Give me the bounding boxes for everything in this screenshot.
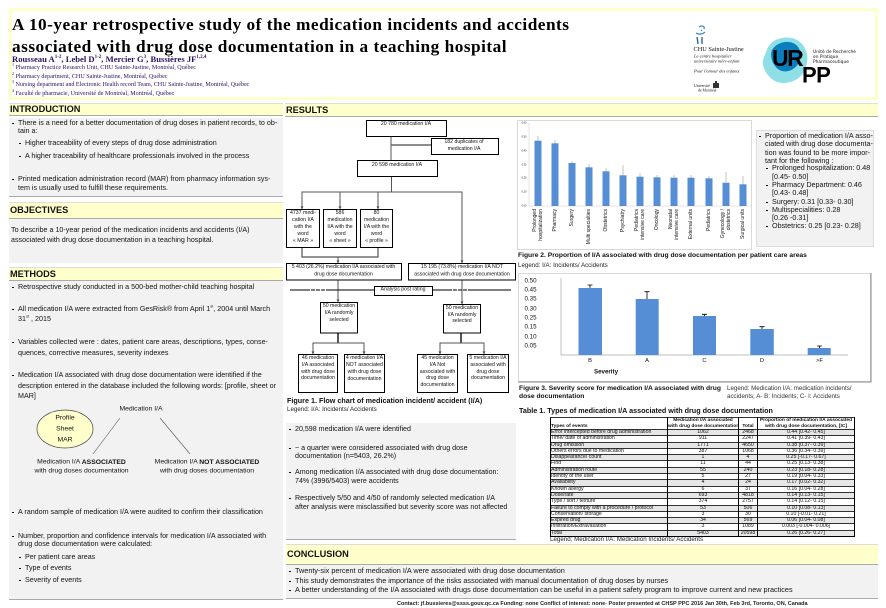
panel: conclusion xyxy=(286,544,878,599)
heading: introduction: INTRODUCTION xyxy=(10,104,80,114)
text: methods body: 31st , 2015 xyxy=(18,314,51,323)
panel: proportion by care area xyxy=(756,130,874,247)
text: introduction bullets: Higher traceability of every steps of drug dose administration xyxy=(25,139,217,147)
table 1: types of events: Disappearance/ count xyxy=(551,454,601,460)
box: remaining medication I/A xyxy=(358,160,438,176)
table 1: types of events: Others errors due to medication xyxy=(551,448,624,454)
table 1: types of events: 2247 xyxy=(742,435,754,441)
text: methods body: Severity of events xyxy=(25,576,82,584)
text: introduction bullets: There is a need for a better documentation of drug doses in patient records, to ob- xyxy=(18,119,277,127)
logo: CHU Sainte-Justine: universitaire mère-enfant xyxy=(694,58,740,64)
box: 46 associated: with drug dose xyxy=(301,369,335,375)
table 1: types of events: Expired drug xyxy=(551,517,580,523)
table 1: types of events: 1089 xyxy=(742,523,754,529)
bar chart: figure 2: 0.50 xyxy=(522,136,527,138)
box: 46 associated xyxy=(298,354,338,392)
bar chart: figure 2 xyxy=(517,120,752,250)
bar chart: figure 3 severity: 0.15 xyxy=(524,324,537,330)
title: A 10-year retrospective study of the medication incidents and accidents xyxy=(12,15,570,34)
table 1: types of events: 0.10 [-0.01- 0.21] xyxy=(786,511,826,517)
table 1: types of events: Infiltration/Extravasation xyxy=(551,523,606,529)
bar chart: figure 2: intensive care xyxy=(640,209,646,240)
heading: results xyxy=(285,103,878,117)
table 1: types of events: Identity of the user xyxy=(551,473,594,479)
box: word profile: « profile » xyxy=(365,238,388,244)
box: total medication I/A: 20 780 medication I/A xyxy=(381,121,432,127)
text: introduction bullets: tem is usually used to fulfill these requirements. xyxy=(18,184,168,192)
table 1: types of events: 0.25 [0.13- 0.38] xyxy=(787,460,825,466)
box: 50 randomly selected, left xyxy=(320,302,358,333)
table 1: types of events: 1068 xyxy=(742,448,754,454)
table 1: types of events: 569 xyxy=(744,517,752,523)
title: associated with drug dose documentation in a teaching hospital xyxy=(12,37,507,56)
table 1: types of events: 34 xyxy=(700,517,706,523)
box: remaining medication I/A: 20 598 medication I/A xyxy=(372,162,423,168)
text: methods body xyxy=(9,281,283,600)
table 1: types of events: 0.14 [0.13- 0.15] xyxy=(787,492,825,498)
heading: methods: METHODS xyxy=(10,269,56,279)
bar chart: figure 3 severity: 0.45 xyxy=(524,286,537,294)
panel: results bullets: documentation (n=5403, 26.2%) xyxy=(295,452,396,460)
panel: proportion by care area: [0.26 -0.31] xyxy=(772,213,808,222)
table 1: types of events: 27 xyxy=(745,473,751,479)
logo: URPP: Unité de Recherche xyxy=(813,48,856,55)
caption: figure 1: Figure 1. Flow chart of medication incident/ accident (I/A) xyxy=(287,396,482,405)
table 1: types of events: 24 xyxy=(745,479,751,485)
logo: URPP: UR xyxy=(772,45,804,71)
text: methods body: A random sample of medication I/A were audited to confirm their classification xyxy=(18,508,263,516)
affiliations xyxy=(12,62,250,97)
header banner xyxy=(9,8,878,100)
box: 50 randomly selected, right: 50 medication xyxy=(446,305,478,311)
box: 50 randomly selected, right: I/A randomly xyxy=(448,312,477,318)
bar chart: figure 2: 0.20 xyxy=(522,176,527,180)
bar chart: figure 3 severity: 0.30 xyxy=(524,306,537,312)
legend: figure 3: accidents; A- B: Incidents; C- I: Accidents xyxy=(727,392,840,400)
bar chart: figure 2: 0.00 xyxy=(522,204,527,208)
box: 5 associated xyxy=(468,354,508,392)
text: methods body: Type of events xyxy=(25,564,71,572)
table 1: types of events: 1771 xyxy=(697,442,709,448)
box: 50 randomly selected, right xyxy=(444,304,480,333)
table 1: types of events: 506 xyxy=(744,505,752,511)
box: word profile: 80 xyxy=(374,210,379,216)
bar chart: figure 2: Psychiatry xyxy=(620,209,626,232)
affiliations: 2 Pharmacy department, CHU Sainte-Justine, Montréal, Québec xyxy=(12,71,168,80)
bar chart: figure 2: intensive care xyxy=(674,209,680,240)
bar chart: figure 2: Pediatrics xyxy=(706,208,712,231)
box: word profile xyxy=(360,210,392,248)
table 1: types of events: 6 xyxy=(702,486,704,492)
table 1: types of events: Error intercepted before drug administration xyxy=(551,429,651,435)
table 1: types of events: with drug dose documentation, [IC] xyxy=(765,424,847,428)
logo: URPP xyxy=(762,38,856,88)
heading: objectives xyxy=(9,202,283,219)
box: word profile: I/A with the xyxy=(364,224,389,230)
bar chart: figure 3 severity: D xyxy=(760,358,764,364)
bar chart: figure 2: Oncology xyxy=(654,209,660,230)
text: methods body: Medication I/A associated with drug dose documentation were identified if the xyxy=(18,371,262,379)
box: 4 not associated: documentation xyxy=(347,376,382,382)
bar chart: figure 3 severity: 0.50 xyxy=(524,278,537,284)
panel: results bullets: Among medication I/A associated with drug dose documentation: xyxy=(295,468,498,476)
box: 46 associated: I/A associated xyxy=(302,362,334,368)
bar chart: figure 2: Prolonged xyxy=(532,209,538,232)
box: total medication I/A xyxy=(366,120,446,136)
bar chart: figure 2: Gynecology / xyxy=(720,208,726,238)
box: word MAR xyxy=(286,210,320,248)
table 1: types of events: 0.41 [0.39- 0.43] xyxy=(787,435,825,441)
box: 45 not associated: associated with xyxy=(420,369,455,375)
text: methods body: quences, corrective measures, severity indexes xyxy=(18,349,168,357)
table 1: types of events: 911 xyxy=(699,435,707,441)
table 1: types of events: 11 xyxy=(700,460,706,466)
logo: CHU Sainte-Justine: CHU Sainte-Justine xyxy=(694,46,744,53)
text: objectives xyxy=(9,219,283,263)
bar chart: figure 3 severity: Severity xyxy=(594,368,619,376)
bar chart: figure 2: 0.60 xyxy=(522,122,527,124)
panel: proportion by care area: Pharmacy Department: 0.46 xyxy=(772,180,862,189)
caption: figure 2: Figure 2. Proportion of I/A associated with drug dose documentation per patient care areas xyxy=(518,252,807,259)
text: conclusion bullets: Twenty-six percent of medication I/A were associated with drug dose documentation xyxy=(295,566,565,575)
box: associated with documentation: drug dose documentation xyxy=(314,272,373,278)
diagram: medication I/A classification: MAR xyxy=(57,436,73,444)
box: 50 randomly selected, left: I/A randomly xyxy=(325,310,354,316)
legend: figure 3 xyxy=(727,385,852,400)
bar chart: figure 2: obstetrics xyxy=(726,209,732,230)
bar chart: figure 2: Surgical units xyxy=(740,209,746,239)
box: word sheet: I/A with the xyxy=(327,224,353,230)
table 1: types of events: 3 xyxy=(702,523,704,529)
caption: figure 3 xyxy=(519,385,721,400)
table 1: types of events: 5 xyxy=(702,473,704,479)
table 1: types of events: 30 xyxy=(745,511,751,517)
legend: figure 2: Legend: I/A: Incidents/ Accidents xyxy=(518,262,608,269)
table 1: types of events: 0.16 [0.04- 0.28] xyxy=(787,486,825,492)
box: word sheet: medication xyxy=(327,217,353,223)
panel: methods xyxy=(9,267,283,600)
box: 46 associated: 46 medication xyxy=(302,355,334,361)
box: 4 not associated: 4 medication I/A xyxy=(346,355,384,361)
box: duplicates: medication I/A xyxy=(448,146,481,152)
caption: table 1: Table 1. Types of medication I/A associated with drug dose documentation xyxy=(519,406,773,415)
panel: proportion by care area: Proportion of medication I/A asso- xyxy=(765,131,873,140)
table 1: types of events: 0.003 [-0.004- 0.006] xyxy=(782,523,830,529)
table 1: types of events: Failure to comply with a procedure / protocol xyxy=(551,505,653,511)
bar chart: figure 2: hospitalization xyxy=(538,209,544,241)
table 1: types of events: 4 xyxy=(747,454,749,460)
box: 5 associated: documentation xyxy=(471,375,505,381)
logo: CHU Sainte-Justine: Le centre hospitalier xyxy=(693,54,732,58)
table 1: types of events: 0.23 [0.18- 0.28] xyxy=(787,467,825,473)
box: 45 not associated: 45 medication xyxy=(421,355,454,361)
table 1: types of events: Known allergy xyxy=(551,486,584,492)
bar chart: figure 2: Pediatrics xyxy=(634,208,640,231)
text: methods body: Retrospective study conducted in a 500-bed mother-child teaching hospital xyxy=(18,283,254,291)
panel: objectives xyxy=(9,202,283,263)
box: 46 associated: documentation xyxy=(301,375,335,381)
bar chart: figure 2: 0.30 xyxy=(522,164,527,166)
text: objectives: To describe a 10-year period of the medication incidents and accidents (I/A) xyxy=(11,226,250,234)
box: associated with documentation xyxy=(286,264,402,280)
bar chart: figure 2: Neonatal xyxy=(668,209,674,229)
table 1: types of events: 20598 xyxy=(741,530,755,536)
panel: proportion by care area: ciated with drug dose documenta- xyxy=(765,139,873,148)
box: word MAR: 4737 medi- xyxy=(290,210,316,216)
panel: proportion by care area: Obstetrics: 0.25 [0.23- 0.28] xyxy=(772,221,861,230)
box: word sheet: 586 xyxy=(336,210,344,216)
box: duplicates: 182 duplicates of xyxy=(444,139,484,145)
heading: results: RESULTS xyxy=(286,105,328,115)
table 1: types of events: 1062 xyxy=(697,429,709,435)
heading: conclusion: CONCLUSION xyxy=(287,549,349,559)
table 1: types of events: Drug omission xyxy=(551,442,584,448)
text: methods body: Variables collected were : dates, patient care areas, descriptions, types, conse- xyxy=(18,338,268,346)
diagram: medication I/A classification xyxy=(33,406,259,474)
box: word MAR: « MAR » xyxy=(293,238,313,244)
bar chart: figure 2: Surgery xyxy=(569,209,575,227)
heading: introduction xyxy=(9,103,283,116)
table 1: types of events: Total xyxy=(551,530,562,536)
panel: proportion by care area: tion was found to be more impor- xyxy=(765,148,870,157)
box: 5 associated: drug dose xyxy=(476,369,500,375)
table 1: types of events: 5403 xyxy=(697,530,709,536)
bar chart: figure 2: Obstetrics xyxy=(603,209,609,232)
diagram: medication I/A classification: with drug doses documentation xyxy=(159,468,254,474)
box: 4 not associated: NOT associated xyxy=(346,362,383,368)
table 1: types of events: 4 xyxy=(702,479,704,485)
text: objectives: associated with drug dose documentation in a teaching hospital. xyxy=(11,236,213,244)
table 1: types of events: 0.19 [0.04- 0.33] xyxy=(787,473,825,479)
authors: Rousseau A1-2, Lebel D1-2, Mercier G3, Bussières JF1,2,4 xyxy=(12,54,206,64)
table 1: types of events: Medication I/A associated xyxy=(673,418,733,423)
panel: results bullets xyxy=(286,423,516,540)
footer: contact and disclosure: Contact: jf.bussieres@ssss.gouv.qc.ca Funding: none Conflict of interest: none- Poster presented at CHSP PPC 2016 Jan 30th, Feb 3rd, Toronto, ON, Canada xyxy=(397,601,808,607)
caption: figure 3: dose documentation xyxy=(519,392,584,400)
table 1: types of events: 44 xyxy=(745,460,751,466)
table 1: types of events: 2468 xyxy=(742,429,754,435)
panel: proportion by care area: [0.43- 0.48] xyxy=(772,188,808,197)
panel: results bullets: 20,598 medication I/A were identified xyxy=(295,425,411,433)
panel: proportion by care area: tant for the following : xyxy=(765,156,833,165)
caption: figure 3: Figure 3. Severity score for medication I/A associated with drug xyxy=(519,385,721,392)
table 1: types of events: 0.06 [0.04- 0.08] xyxy=(787,517,825,523)
table 1: types of events: 0.38 [0.37- 0.39] xyxy=(787,442,825,448)
table 1: types of events: Conservation/ storage xyxy=(551,511,602,517)
box: 5 associated: 5 medication I/A xyxy=(469,355,507,361)
panel: proportion by care area: Prolonged hospitalization: 0.48 xyxy=(772,163,870,172)
logo: URPP: PP xyxy=(802,62,830,88)
heading: conclusion xyxy=(286,544,878,565)
diagram: medication I/A classification: with drug doses documentation xyxy=(33,468,129,474)
box: 4 not associated: with drug dose xyxy=(348,369,381,375)
text: conclusion bullets: This study demonstrates the importance of the risks associated with manual documentation of drug doses by nurses xyxy=(295,576,668,585)
table 1: types of events: 693 xyxy=(699,492,707,498)
bar chart: figure 3 severity: 0.35 xyxy=(524,296,537,302)
table 1: types of events: Total xyxy=(742,424,754,428)
box: not associated with documentation xyxy=(408,264,516,280)
bar chart: figure 2: Pharmacy xyxy=(552,209,558,232)
table 1: types of events: 53 xyxy=(700,505,706,511)
bar chart: figure 3 severity xyxy=(518,273,872,382)
affiliations: 4 Faculté de pharmacie, Université de Montréal, Montréal, Québec xyxy=(12,88,174,97)
table 1: types of events: with drug dose documentation xyxy=(668,424,739,428)
text: methods body: Per patient care areas xyxy=(25,553,95,561)
logo: CHU Sainte-Justine: Université xyxy=(694,84,710,88)
box: associated with documentation: 5 403 (26.2%) medication I/A associated with xyxy=(292,264,395,270)
bar chart: figure 3 severity: 0.05 xyxy=(524,342,537,350)
bar chart: figure 2: 0.40 xyxy=(522,150,527,152)
box: 5 associated: associated with xyxy=(470,362,506,368)
text: conclusion bullets: A better understanding of the I/A associated with drugs dose documentation can be useful in a patient safety program to improve current and new practices xyxy=(295,585,793,594)
panel: results bullets: after analysis were misclassified but severity score was not affected xyxy=(295,503,507,511)
table 1: types of events: 0.17 [0.02- 0.32] xyxy=(787,479,825,485)
box: not associated with documentation: associated with drug dose documentation xyxy=(414,272,510,278)
title xyxy=(12,15,570,56)
bar chart: figure 3 severity: 0.10 xyxy=(524,334,537,340)
text: methods body: All medication I/A were extracted from GesRisk® from April 1st, 2004 until March xyxy=(18,304,270,313)
heading: methods xyxy=(9,267,283,281)
box: word sheet: « sheet » xyxy=(329,238,351,244)
panel: results bullets: Respectively 5/50 and 4/50 of randomly selected medication I/A xyxy=(295,494,495,502)
panel: introduction xyxy=(9,103,283,197)
panel: proportion by care area: [0.45- 0.50] xyxy=(772,172,808,181)
table 1: types of events: Administration route xyxy=(551,467,597,473)
bar chart: figure 2: Multi specialties xyxy=(586,209,592,244)
table 1: types of events: 374 xyxy=(699,498,707,504)
table 1: types of events: 37 xyxy=(745,486,751,492)
text: conclusion bullets xyxy=(286,565,878,599)
panel: results bullets: 74% (3996/5403) were accidents xyxy=(295,477,399,485)
text: methods body: Number, proportion and confidence intervals for medication I/A associated with xyxy=(18,532,266,540)
box: analysis post rating xyxy=(374,286,432,296)
box: word profile: word xyxy=(371,231,382,237)
table 1: types of events: 2757 xyxy=(742,498,754,504)
table 1: types of events: 0.10 [0.08- 0.13] xyxy=(787,505,825,511)
table 1: types of events: 4650 xyxy=(742,442,754,448)
bar chart: figure 3 severity: >F xyxy=(816,358,823,364)
table 1: types of events: Time/ date of administration xyxy=(551,435,615,441)
box: 4 not associated xyxy=(344,354,384,392)
text: introduction bullets: A higher traceability of healthcare professionals involved in the process xyxy=(25,152,249,160)
table 1: types of events: 0.26 [0.26- 0.27] xyxy=(787,530,825,536)
table 1: types of events: Types of events xyxy=(551,424,588,428)
table 1: types of events: 3 xyxy=(702,511,704,517)
box: 45 not associated: documentation xyxy=(420,382,455,388)
box: 50 randomly selected, right: selected xyxy=(452,318,472,324)
panel: proportion by care area: Multispecialities: 0.28 xyxy=(772,205,840,214)
box: 45 not associated xyxy=(418,354,458,392)
table 1: types of events: 4818 xyxy=(742,492,754,498)
box: analysis post rating: Analysis post rating xyxy=(381,286,426,292)
bar chart: figure 3 severity: B xyxy=(588,358,592,364)
bar chart: figure 3 severity: C xyxy=(702,358,707,364)
table 1: types of events: Type / sort / texture xyxy=(551,498,595,504)
bar chart: figure 3 severity: A xyxy=(645,358,649,364)
table 1: types of events: 240 xyxy=(744,467,752,473)
bar chart: figure 2: 0.10 xyxy=(522,190,527,194)
table 1: types of events: Proportion of medication I/A associated xyxy=(760,418,852,423)
table 1: types of events xyxy=(550,417,855,537)
diagram: medication I/A classification: Medication I/A ASSOCIATED xyxy=(37,458,126,466)
table 1: types of events: 0.25 [-0.17- 0.67] xyxy=(786,454,826,460)
box: 50 randomly selected, left: 50 medication xyxy=(323,303,355,309)
legend: figure 1: Legend: I/A: Incidents/ Accidents xyxy=(287,406,377,413)
box: duplicates xyxy=(432,138,498,154)
text: introduction bullets: tain a: xyxy=(18,127,37,135)
box: word sheet xyxy=(324,210,356,248)
box: 45 not associated: I/A Not xyxy=(430,362,446,368)
panel: proportion by care area: Surgery: 0.31 [0.33- 0.30] xyxy=(772,197,854,206)
flow chart: medication incidents and accidents xyxy=(286,120,516,393)
panel: results bullets: ~ a quarter were considered associated with drug dose xyxy=(295,444,468,452)
table 1: types of events: 1 xyxy=(702,454,704,460)
diagram: medication I/A classification: Sheet xyxy=(56,426,74,432)
table 1: types of events: 387 xyxy=(699,448,707,454)
box: 50 randomly selected, left: selected xyxy=(329,317,349,323)
affiliations: 3 Nursing department and Electronic Health record Team, CHU Sainte-Justine, Montréal, Québec xyxy=(12,79,249,88)
text: methods body: drug dose documentation were calculated: xyxy=(18,540,152,548)
diagram: medication I/A classification: Medication I/A NOT ASSOCIATED xyxy=(155,458,259,466)
heading: objectives: OBJECTIVES xyxy=(10,205,68,215)
table 1: types of events: 0.14 [0.12- 0.15] xyxy=(787,498,825,504)
box: word MAR: with the xyxy=(294,224,312,230)
box: not associated with documentation: 15 195 (73.8%) medication I/A NOT xyxy=(421,264,504,270)
table 1: types of events: 0.44 [0.42- 0.45] xyxy=(787,429,825,435)
box: 45 not associated: drug dose xyxy=(426,375,449,381)
logo: CHU Sainte-Justine: Pour l'amour des enfants xyxy=(693,68,740,74)
table 1: types of events: Dose/rate xyxy=(551,492,574,498)
text: methods body: MAR] xyxy=(18,392,36,400)
legend: table 1: Legend: Medication I/A: Medication Incidents/ Accidents xyxy=(550,536,703,543)
bar chart: figure 3 severity: 0.25 xyxy=(524,314,537,322)
table 1: types of events: 55 xyxy=(700,467,706,473)
text: methods body: description entered in the database included the following words: [profile, sheet or xyxy=(18,382,276,390)
diagram: medication I/A classification: Medication I/A xyxy=(119,406,163,412)
logo: URPP: Pharmaceutique xyxy=(813,59,849,65)
text: introduction bullets xyxy=(9,118,283,197)
bar chart: figure 2: External units xyxy=(688,209,694,239)
text: introduction bullets: Printed medication administration record (MAR) from pharmacy information sys- xyxy=(18,175,270,183)
logo: CHU Sainte-Justine: de Montréal xyxy=(698,88,716,92)
box: word profile: medication xyxy=(364,217,389,223)
table 1: types of events: 0.36 [0.34- 0.39] xyxy=(787,448,825,454)
logo: URPP: en Pratique xyxy=(813,54,838,60)
box: word sheet: word xyxy=(334,231,346,237)
legend: figure 3: Legend: Medication I/A: medication incidents/ xyxy=(727,385,852,392)
logo: CHU Sainte-Justine xyxy=(693,25,744,92)
table 1: types of events: Availability xyxy=(551,479,575,485)
box: word MAR: word xyxy=(297,231,309,237)
affiliations: 1 Pharmacy Practice Research Unit, CHU Sainte-Justine, Montréal, Québec xyxy=(12,62,196,71)
table 1: types of events: Find xyxy=(551,460,561,466)
box: word MAR: cation I/A xyxy=(292,217,314,223)
diagram: medication I/A classification: Profile xyxy=(55,414,75,422)
